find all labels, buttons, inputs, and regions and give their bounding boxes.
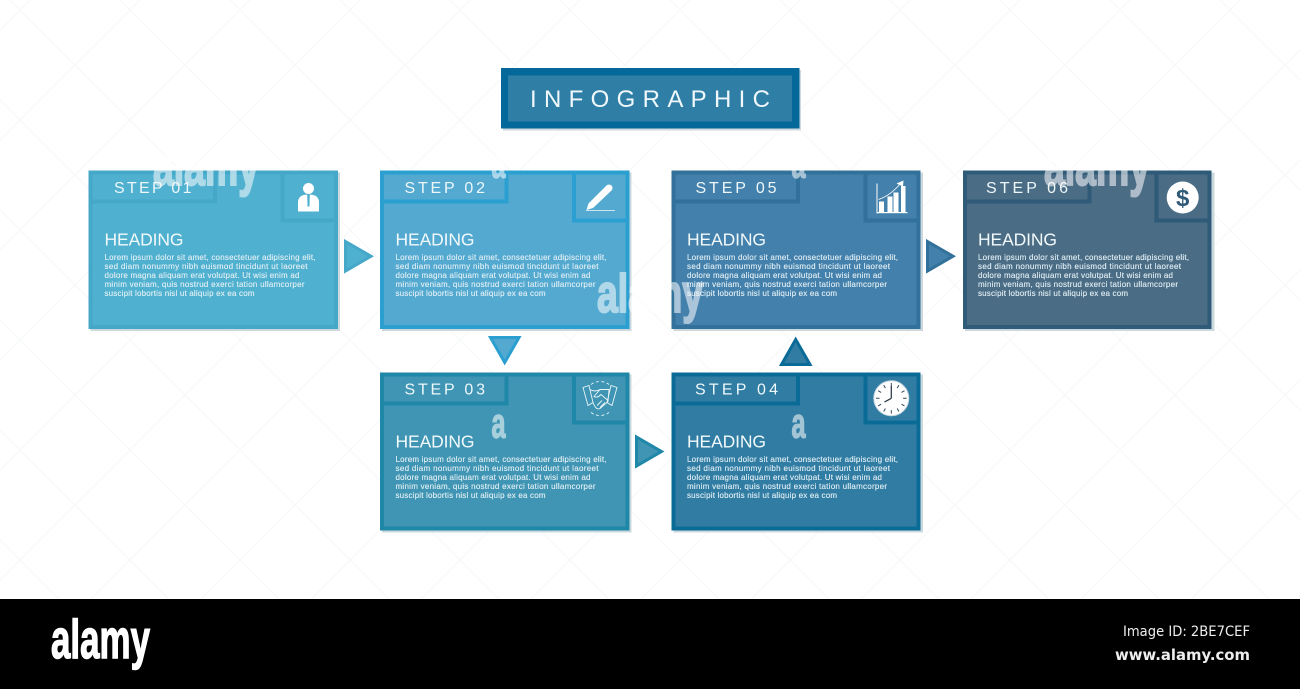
panel: step 02: Lorem ipsum dolor sit amet, consectetuer adipiscing elit, bbox=[396, 253, 606, 262]
icon: person bbox=[298, 183, 319, 212]
panel: step 04: suscipit lobortis nisl ut aliquip ex ea com bbox=[687, 491, 837, 500]
watermark: alamy overlays: a bbox=[492, 400, 506, 446]
panel: step 02: suscipit lobortis nisl ut aliquip ex ea com bbox=[396, 289, 546, 298]
panel: step 06: minim veniam, quis nostrud exerci tation ullamcorper bbox=[978, 280, 1178, 289]
panel: step 01: minim veniam, quis nostrud exerci tation ullamcorper bbox=[104, 280, 305, 289]
icon: clock bbox=[874, 381, 909, 416]
panel: step 02: minim veniam, quis nostrud exerci tation ullamcorper bbox=[396, 280, 596, 289]
footer band bbox=[0, 599, 1300, 689]
panel: step 05: STEP 05 bbox=[696, 180, 777, 197]
watermark: alamy overlays: a bbox=[492, 140, 506, 186]
arrow: step 02 to step 03 bbox=[490, 338, 519, 362]
panel: step 04 bbox=[672, 372, 923, 532]
panel: step 02: HEADING bbox=[396, 230, 474, 250]
watermark: alamy overlays bbox=[153, 134, 1150, 446]
icon: handshake bbox=[583, 382, 617, 416]
watermark: alamy overlays: alamy bbox=[153, 134, 259, 197]
panel: step 01: STEP 01 bbox=[114, 180, 192, 197]
panel: step 04: HEADING bbox=[687, 432, 766, 452]
icon: dollar coin: $ bbox=[1176, 185, 1190, 212]
panel: step 05: minim veniam, quis nostrud exerci tation ullamcorper bbox=[687, 280, 887, 289]
panel: step 01: suscipit lobortis nisl ut aliquip ex ea com bbox=[104, 289, 255, 298]
panel: step 04: dolore magna aliquam erat volutpat. Ut wisi enim ad bbox=[687, 473, 882, 482]
panel: step 03: STEP 03 bbox=[404, 382, 485, 398]
panel: step 01: dolore magna aliquam erat volutpat. Ut wisi enim ad bbox=[104, 271, 300, 280]
panel: step 04: STEP 04 bbox=[695, 382, 778, 398]
panel: step 05: Lorem ipsum dolor sit amet, consectetuer adipiscing elit, bbox=[687, 253, 898, 262]
panel: step 06 bbox=[963, 170, 1214, 331]
panel: step 03: HEADING bbox=[396, 432, 474, 452]
panel: step 02 bbox=[380, 170, 632, 331]
panel: step 05: suscipit lobortis nisl ut aliquip ex ea com bbox=[687, 289, 837, 298]
panel: step 05: dolore magna aliquam erat volutpat. Ut wisi enim ad bbox=[687, 271, 882, 280]
panel: step 04: sed diam nonummy nibh euismod tincidunt ut laoreet bbox=[687, 464, 891, 473]
panel: step 06: Lorem ipsum dolor sit amet, consectetuer adipiscing elit, bbox=[978, 253, 1189, 262]
panel: step 04: Lorem ipsum dolor sit amet, consectetuer adipiscing elit, bbox=[687, 455, 898, 464]
title bbox=[501, 68, 801, 130]
panel: step 05 bbox=[672, 170, 923, 331]
panel: step 02: sed diam nonummy nibh euismod tincidunt ut laoreet bbox=[396, 262, 599, 271]
panel: step 03: suscipit lobortis nisl ut aliquip ex ea com bbox=[396, 491, 546, 500]
icon: dollar coin bbox=[1167, 182, 1199, 214]
panel: step 06: sed diam nonummy nibh euismod tincidunt ut laoreet bbox=[978, 262, 1182, 271]
website: www.alamy.com bbox=[1115, 646, 1250, 664]
panel: step 01: Lorem ipsum dolor sit amet, consectetuer adipiscing elit, bbox=[104, 253, 316, 262]
panel: step 03 bbox=[380, 372, 632, 532]
panel: step 01: sed diam nonummy nibh euismod tincidunt ut laoreet bbox=[104, 262, 308, 271]
panel: step 03: minim veniam, quis nostrud exerci tation ullamcorper bbox=[396, 482, 596, 491]
icon: pencil bbox=[586, 184, 615, 211]
panel: step 03: sed diam nonummy nibh euismod tincidunt ut laoreet bbox=[396, 464, 599, 473]
panel: step 04: minim veniam, quis nostrud exerci tation ullamcorper bbox=[687, 482, 887, 491]
image id: Image ID: 2BE7CEF bbox=[1123, 624, 1250, 640]
watermark: alamy overlays: a bbox=[792, 400, 806, 446]
watermark: alamy overlays: alamy bbox=[597, 264, 703, 324]
panel: step 01 bbox=[88, 170, 340, 331]
title: INFOGRAPHIC bbox=[530, 86, 770, 113]
panel: step 02: dolore magna aliquam erat volutpat. Ut wisi enim ad bbox=[396, 271, 590, 280]
arrow: step 03 to step 04 bbox=[636, 437, 662, 466]
panel: step 05: sed diam nonummy nibh euismod tincidunt ut laoreet bbox=[687, 262, 891, 271]
watermark: alamy overlays: a bbox=[792, 140, 806, 186]
watermark: alamy overlays: alamy bbox=[1044, 134, 1150, 197]
panel: step 01: HEADING bbox=[104, 230, 184, 250]
panel: step 02: STEP 02 bbox=[404, 180, 485, 197]
panel: step 06: suscipit lobortis nisl ut aliquip ex ea com bbox=[978, 289, 1128, 298]
arrow: step 01 to step 02 bbox=[346, 242, 371, 271]
panel: step 06: HEADING bbox=[978, 230, 1057, 250]
panel: step 03: Lorem ipsum dolor sit amet, consectetuer adipiscing elit, bbox=[396, 455, 606, 464]
panel: step 06: dolore magna aliquam erat volutpat. Ut wisi enim ad bbox=[978, 271, 1173, 280]
arrow: step 04 to step 05 bbox=[782, 340, 810, 364]
logo: alamy: alamy bbox=[51, 608, 150, 670]
icon: bar chart bbox=[876, 180, 908, 214]
panel: step 05: HEADING bbox=[687, 230, 766, 250]
arrow: step 05 to step 06 bbox=[928, 242, 953, 271]
panel: step 06: STEP 06 bbox=[986, 180, 1068, 197]
panel: step 03: dolore magna aliquam erat volutpat. Ut wisi enim ad bbox=[396, 473, 590, 482]
